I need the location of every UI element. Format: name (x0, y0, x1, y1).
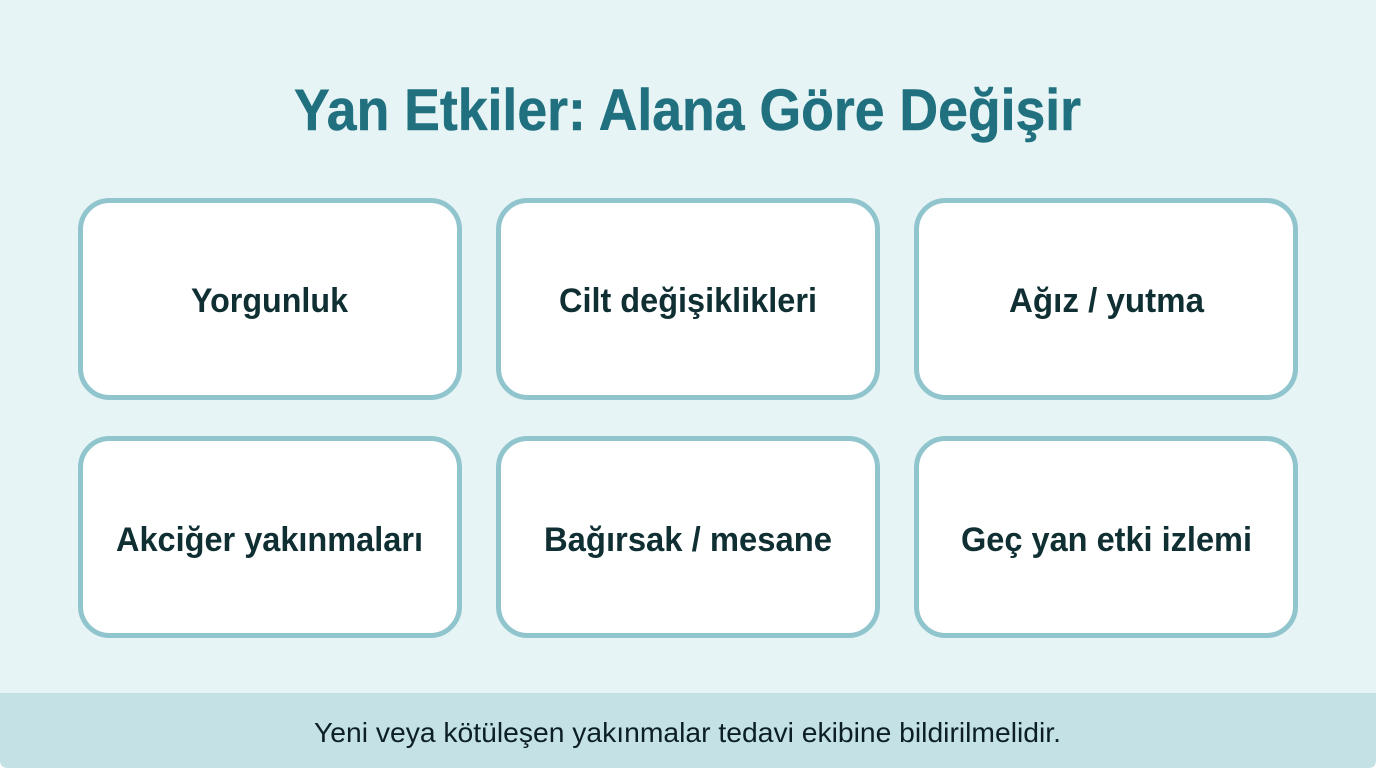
card: Bağırsak / mesane (498, 438, 878, 636)
footer band (0, 693, 1376, 768)
card: Akciğer yakınmaları: Akciğer yakınmaları (116, 521, 423, 559)
card: Akciğer yakınmaları (80, 438, 460, 636)
card: Ağız / yutma (916, 200, 1296, 398)
footer note: Yeni veya kötüleşen yakınmalar tedavi ekibine bildirilmelidir. (314, 717, 1061, 748)
card: Yorgunluk (80, 200, 460, 398)
card: Geç yan etki izlemi (916, 438, 1296, 636)
card: Cilt değişiklikleri: Cilt değişiklikleri (559, 282, 817, 320)
card: Bağırsak / mesane: Bağırsak / mesane (544, 521, 832, 559)
card: Ağız / yutma: Ağız / yutma (1009, 282, 1205, 320)
card: Geç yan etki izlemi: Geç yan etki izlemi (961, 521, 1252, 559)
title: Yan Etkiler: Alana Göre Değişir (294, 78, 1081, 143)
card: Yorgunluk: Yorgunluk (191, 282, 348, 320)
card: Cilt değişiklikleri (498, 200, 878, 398)
